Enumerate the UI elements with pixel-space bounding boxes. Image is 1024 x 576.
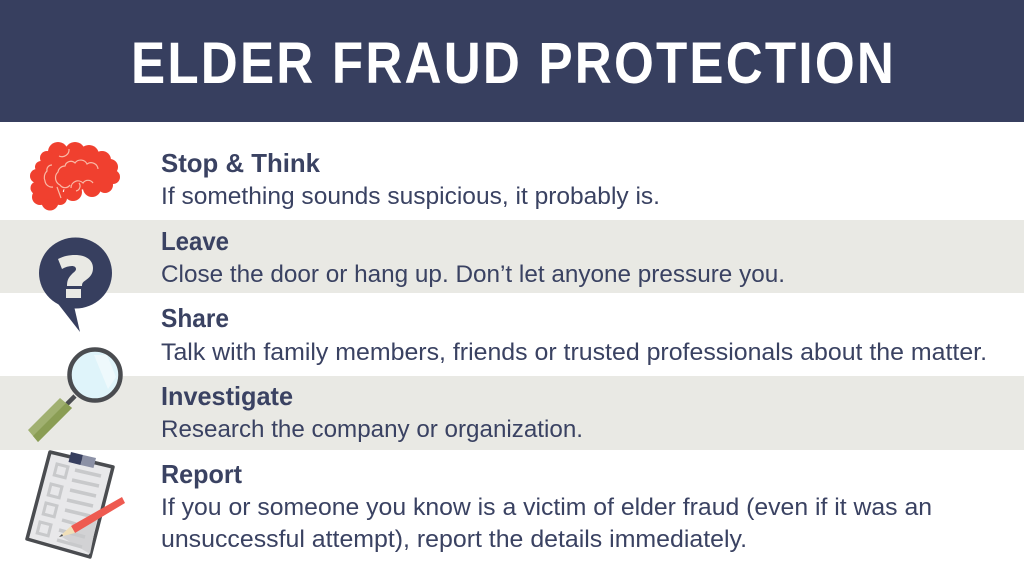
text: report continued: unsuccessful attempt), report the details immediately. (161, 526, 747, 553)
text: stop and think: If something sounds suspicious, it probably is. (161, 183, 660, 210)
heading: share: Share (161, 303, 229, 333)
icon: brain (30, 142, 120, 210)
heading: report: Report (161, 459, 242, 489)
text: investigate: Research the company or organization. (161, 416, 583, 443)
text: report: If you or someone you know is a victim of elder fraud (even if it was an (161, 494, 932, 521)
row: stop and think (161, 148, 660, 210)
row: investigate (161, 381, 583, 443)
heading: leave: Leave (161, 226, 229, 256)
icon: magnifying glass (28, 350, 120, 442)
header banner (0, 0, 1024, 122)
icon: question bubble (39, 238, 112, 332)
row: report (161, 459, 932, 553)
row: share (161, 303, 987, 366)
heading: investigate: Investigate (161, 381, 293, 411)
heading: stop and think: Stop & Think (161, 148, 321, 178)
band: leave row (0, 220, 1024, 293)
title: ELDER FRAUD PROTECTION (131, 31, 896, 96)
icon: clipboard with pencil (27, 452, 125, 557)
row: leave (161, 226, 785, 288)
text: leave: Close the door or hang up. Don’t let anyone pressure you. (161, 261, 785, 288)
band: investigate row (0, 376, 1024, 450)
text: share: Talk with family members, friends or trusted professionals about the matter. (161, 339, 987, 366)
